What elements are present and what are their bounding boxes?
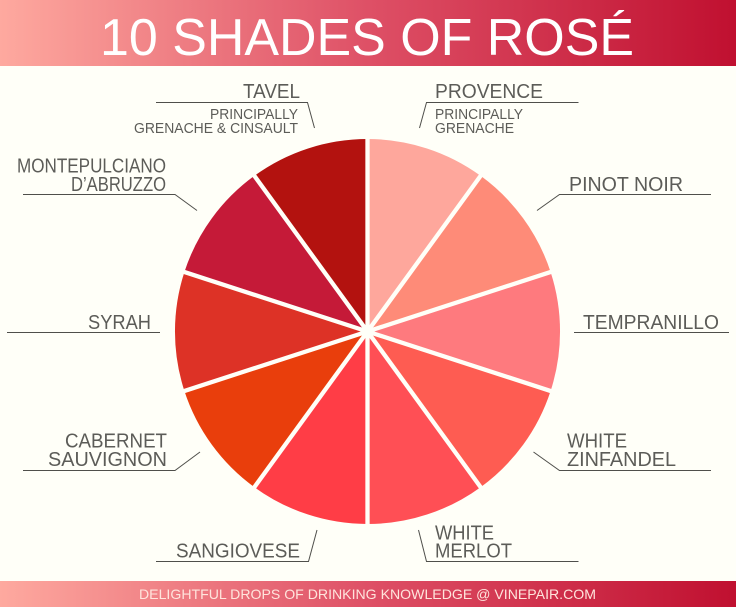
footer credit: DELIGHTFUL DROPS OF DRINKING KNOWLEDGE @ VINEPAIR.COM bbox=[139, 586, 596, 602]
label: Provence bbox=[420, 81, 578, 137]
label: Syrah: SYRAH bbox=[88, 312, 151, 334]
slice: Tavel bbox=[254, 139, 368, 332]
header banner bbox=[0, 0, 736, 67]
label: White Merlot: WHITE bbox=[435, 522, 494, 544]
label: White Merlot bbox=[418, 522, 578, 562]
label: Provence: PROVENCE bbox=[435, 81, 543, 103]
pie chart: ten rosé shades bbox=[175, 136, 560, 527]
label: White Zinfandel bbox=[534, 430, 711, 471]
label: Montepulciano d'Abruzzo: MONTEPULCIANO bbox=[17, 156, 166, 178]
label: Cabernet Sauvignon: SAUVIGNON bbox=[48, 449, 167, 471]
label: Montepulciano d'Abruzzo bbox=[17, 156, 197, 210]
slice: Tempranillo bbox=[368, 272, 560, 391]
label: Tempranillo: TEMPRANILLO bbox=[583, 312, 719, 334]
label: Tavel: PRINCIPALLY bbox=[210, 106, 298, 123]
slice: White Merlot bbox=[368, 332, 481, 524]
label: Sangiovese: SANGIOVESE bbox=[176, 540, 300, 562]
slice: Sangiovese bbox=[254, 332, 368, 524]
label: White Merlot: MERLOT bbox=[435, 540, 512, 562]
label: Cabernet Sauvignon: CABERNET bbox=[65, 430, 167, 452]
slice: Syrah bbox=[175, 272, 368, 391]
slice: Cabernet Sauvignon bbox=[184, 332, 368, 487]
label: Provence: GRENACHE bbox=[435, 120, 514, 137]
label: Tavel: GRENACHE & CINSAULT bbox=[134, 120, 298, 137]
label: Sangiovese bbox=[156, 530, 317, 562]
label: White Zinfandel: ZINFANDEL bbox=[567, 449, 676, 471]
label: Pinot Noir bbox=[537, 174, 711, 210]
label: Tavel bbox=[134, 81, 314, 137]
footer banner bbox=[0, 581, 736, 607]
label: Provence: PRINCIPALLY bbox=[435, 106, 523, 123]
slice: White Zinfandel bbox=[368, 332, 551, 487]
label: White Zinfandel: WHITE bbox=[567, 430, 627, 452]
label: Montepulciano d'Abruzzo: D’ABRUZZO bbox=[71, 174, 166, 196]
title: 10 SHADES OF ROSÉ bbox=[100, 9, 634, 67]
slice: Provence bbox=[368, 139, 481, 332]
label: Tavel: TAVEL bbox=[243, 81, 300, 103]
label: Cabernet Sauvignon bbox=[23, 430, 200, 471]
slice: Montepulciano d'Abruzzo bbox=[184, 176, 368, 332]
slice: Pinot Noir bbox=[368, 176, 551, 332]
label: Pinot Noir: PINOT NOIR bbox=[569, 174, 683, 196]
